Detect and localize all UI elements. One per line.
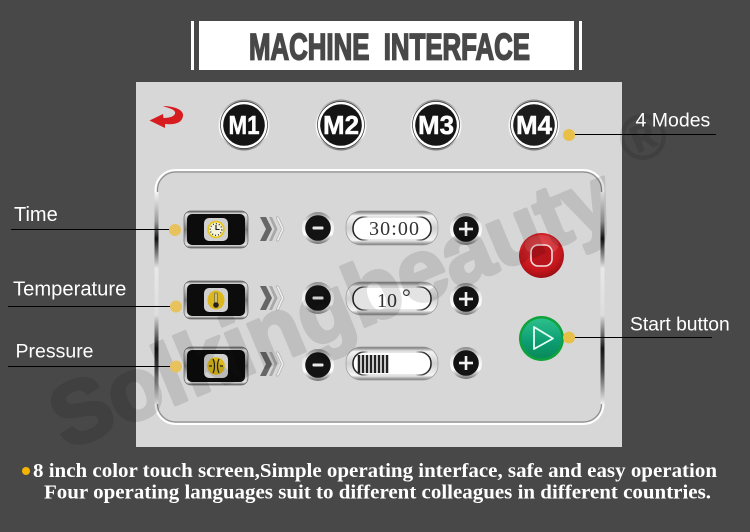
button: M3 — [410, 100, 462, 150]
button: M1 — [218, 100, 270, 150]
icon: temperature — [184, 281, 248, 319]
callout: Time — [11, 204, 181, 236]
button: minus — [302, 349, 334, 381]
button: minus — [302, 212, 334, 244]
display: 10 degrees: 10 — [377, 290, 397, 312]
button: plus — [450, 347, 482, 379]
callout: Pressure: Pressure — [16, 340, 94, 362]
callout: Start button — [563, 314, 730, 344]
title banner — [191, 21, 582, 70]
callout: 4 Modes — [563, 110, 716, 141]
description text: Four operating languages suit to different colleagues in different countries. — [44, 482, 711, 504]
display: 10 degrees: ° — [402, 284, 411, 309]
button: M1: M1 — [228, 110, 260, 140]
button: M4 — [508, 100, 560, 150]
callout: Temperature: Temperature — [13, 278, 126, 300]
chrome inner frame — [154, 170, 604, 424]
display: 30:00 — [346, 211, 438, 245]
icon: chevrons — [260, 286, 284, 310]
icon: chevrons — [260, 352, 284, 376]
callout: Time: Time — [14, 204, 58, 226]
mode buttons — [218, 100, 560, 150]
button: minus — [302, 282, 334, 314]
button: M2: M2 — [323, 110, 359, 140]
row: temperature controls — [184, 281, 482, 319]
callout: Temperature — [8, 278, 182, 312]
button: M4: M4 — [516, 110, 553, 140]
row: time controls — [184, 211, 482, 248]
display: pressure level — [346, 347, 438, 380]
button: M3: M3 — [418, 110, 454, 140]
button: M2 — [316, 100, 366, 150]
callout: 4 Modes: 4 Modes — [636, 110, 711, 132]
title banner: MACHINE INTERFACE — [249, 26, 530, 68]
display: 30:00: 30:00 — [369, 218, 419, 240]
display: 10 degrees — [346, 282, 438, 315]
button: start — [519, 316, 564, 361]
row: pressure controls — [184, 347, 482, 385]
description text: 8 inch color touch screen,Simple operating interface, safe and easy operation — [33, 460, 717, 482]
watermark: ® — [607, 95, 679, 179]
panel: control screen — [136, 82, 622, 447]
icon: chevrons — [260, 217, 284, 241]
icon: pressure — [184, 347, 248, 385]
watermark: Solkingbeauty — [35, 146, 629, 468]
callout: Pressure — [8, 340, 182, 372]
icon: time — [184, 211, 248, 248]
button: stop — [519, 233, 564, 278]
button: plus — [450, 283, 482, 315]
description text — [22, 460, 717, 504]
icon: back arrow — [150, 106, 183, 128]
callout: Start button: Start button — [630, 314, 730, 336]
button: plus — [450, 213, 482, 245]
